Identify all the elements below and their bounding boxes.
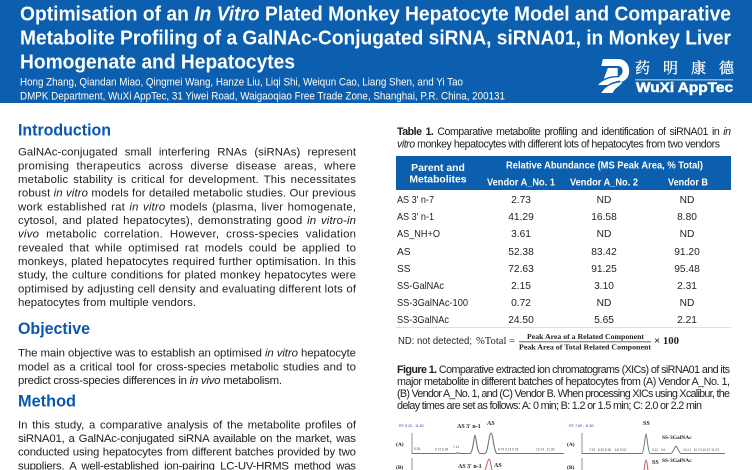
logo: WuXi AppTec — [598, 57, 735, 95]
table header: Vendor A_No. 1 — [487, 178, 555, 189]
text block: introduction: promising therapeutics across diverse disease areas, where — [18, 160, 356, 172]
table footnote formula: %Total = — [476, 336, 515, 347]
text block: method: siRNA01, a GalNAc-conjugated siRNA available on the market, was — [18, 433, 356, 445]
table caption: Table 1. Comparative metabolite profiling and identification of siRNA01 in in — [397, 126, 731, 138]
table rows: 24.50 — [508, 315, 534, 326]
chromatogram: AS panel: (A) — [396, 441, 404, 448]
chromatogram: SS panel: SS-3GalNAc — [662, 435, 692, 441]
authors: Hong Zhang, Qiandan Miao, Qingmei Wang, Hanze Liu, Liqi Shi, Weiqun Cao, Liang Shen, and Yi Tao — [20, 76, 463, 88]
text block: objective: predict cross-species differences in in vivo metabolism. — [18, 375, 282, 387]
title: Homogenate and Hepatocytes — [20, 52, 295, 74]
chromatogram: AS panel: AS — [487, 421, 495, 427]
text block: introduction: hepatocytes from multiple vendors. — [18, 297, 196, 309]
table rows: AS 3' n-7 — [397, 195, 434, 206]
table rows: SS-3GalNAc-100 — [397, 298, 468, 309]
title — [20, 4, 731, 74]
table header: Vendor A_No. 2 — [570, 178, 638, 189]
logo: WuXi AppTec: 药 — [635, 57, 650, 78]
chromatogram: SS panel — [567, 421, 725, 470]
table rows: 91.20 — [674, 247, 700, 258]
table rows: AS 3' n-1 — [397, 212, 434, 223]
table caption: vitro monkey hepatocytes with different lots of hepatocytes from two vendors — [397, 138, 720, 150]
chromatogram: AS panel — [396, 421, 564, 470]
text block: introduction: monkeys, plated hepatocytes required further optimisation. In this — [18, 256, 356, 268]
logo: WuXi AppTec: 明 — [663, 57, 678, 78]
chromatogram: SS panel: 7.93 8.25 8.36 8.8 9.02 — [589, 448, 626, 452]
chromatogram: SS panel: (A) — [567, 441, 575, 448]
chromatogram: AS panel: 10.14 11.06 — [536, 448, 555, 452]
table rows: AS_NH+O — [397, 229, 440, 240]
figure caption: Figure 1. Comparative extracted ion chromatograms (XICs) of siRNA01 and its — [397, 364, 731, 376]
chromatogram: SS panel: SS-3GalNAc — [662, 458, 692, 464]
affiliation: DMPK Department, WuXi AppTec, 31 Yiwei Road, Waigaoqiao Free Trade Zone, Shanghai, P.R. China, 200131 — [20, 90, 505, 102]
table rows: SS — [397, 264, 411, 275]
title: Metabolite Profiling of a GalNAc-Conjugated siRNA, siRNA01, in Monkey Liver — [20, 28, 731, 50]
text block: introduction: work established rat in vitro models (plasma, liver homogenate, — [17, 201, 356, 213]
text block: method: In this study, a comparative analysis of the metabolite profiles of — [18, 419, 357, 431]
table rows: 95.48 — [674, 264, 700, 275]
chromatogram: AS panel: 6.72 6.94 — [435, 448, 449, 452]
table header: Parent and — [411, 163, 465, 174]
text block: introduction: vivo metabolic correlation. However, cross-species validation — [18, 229, 356, 241]
heading: Objective: Objective — [18, 320, 90, 338]
text block: objective: The main objective was to establish an optimised in vitro hepatocyte — [18, 348, 356, 360]
title: Optimisation of an In Vitro Plated Monkey Hepatocyte Model and Comparative — [20, 4, 731, 26]
chromatogram: AS panel: 8.79 9.13 9.26 — [498, 448, 519, 452]
table rows: 0.72 — [511, 298, 531, 309]
table caption — [397, 126, 731, 150]
chromatogram: SS panel: 10.21 10.74 10.97 11.23 — [683, 448, 719, 452]
table footnote formula — [398, 332, 679, 352]
heading: Method: Method — [18, 393, 76, 411]
text block: objective — [18, 348, 356, 387]
table rows: ND — [597, 298, 611, 309]
table rows: 83.42 — [591, 247, 617, 258]
logo: WuXi AppTec: 康 — [691, 57, 706, 78]
chromatogram: SS panel: SS — [643, 421, 650, 427]
heading: Introduction: Introduction — [18, 122, 111, 140]
table header: Relative Abundance (MS Peak Area, % Total) — [506, 160, 703, 171]
chromatogram: SS panel: SS — [652, 460, 659, 466]
text block: introduction: GalNAc-conjugated small interfering RNAs (siRNAs) represent — [18, 147, 357, 159]
text block: objective: model as a critical tool for cross-species metabolic studies and to — [18, 361, 356, 373]
text block: method — [18, 419, 357, 470]
chromatogram: SS panel: RT: 7.60 - 11.50 — [569, 424, 594, 428]
text block: introduction: metabolic stability is critical for development. This necessitates — [18, 174, 356, 186]
table rows: 52.38 — [508, 247, 534, 258]
figure caption: major metabolite in different batches of hepatocytes from (A) Vendor A_No. 1, — [397, 376, 730, 388]
table rows: 2.21 — [677, 315, 697, 326]
logo: WuXi AppTec: WuXi AppTec — [636, 79, 733, 95]
table rows: 41.29 — [508, 212, 534, 223]
table rows: ND — [680, 229, 694, 240]
figure caption: delay times are set as follows: A: 0 min; B: 1.2 or 1.5 min; C: 2.0 or 2.2 min — [397, 400, 702, 412]
chromatogram: AS panel: AS 3' n-1 — [457, 424, 481, 430]
table rows: 72.63 — [508, 264, 534, 275]
table footnote formula: × 100 — [654, 336, 679, 347]
table rows: 5.65 — [594, 315, 614, 326]
text block: introduction: cytosol, and plated hepatocytes), demonstrating good in vitro-in — [18, 215, 356, 227]
text block: introduction: revealed that while optimised rat models could be applied to — [18, 242, 356, 254]
table header — [396, 156, 731, 190]
table footnote formula: Peak Area of Total Related Component — [519, 342, 651, 352]
text block: introduction: optimised by adjusting cell density and evaluating different lots of — [18, 283, 357, 295]
chromatogram: AS panel: RT: 5.20 - 11.50 — [399, 424, 424, 428]
chromatogram: AS panel: AS — [494, 463, 502, 469]
table header: Metabolites — [409, 175, 467, 186]
text block: introduction: robust in vitro models for detailed metabolic studies. Our previous — [18, 188, 356, 200]
table rows: SS-GalNAc — [397, 281, 444, 292]
text block: introduction: study, the culture conditions for plated monkey hepatocytes were — [18, 270, 356, 282]
table rows: 2.15 — [511, 281, 531, 292]
text block: introduction — [17, 147, 357, 309]
table rows: ND — [680, 298, 694, 309]
table rows — [397, 195, 700, 326]
table rows: 8.80 — [677, 212, 697, 223]
table rows: 3.10 — [594, 281, 614, 292]
table rows: 91.25 — [591, 264, 617, 275]
text block: method: conducted using hepatocytes from different batches provided by two — [18, 447, 356, 459]
header banner — [0, 0, 752, 103]
table footnote formula: Peak Area of a Related Component — [527, 332, 644, 341]
table rows: AS — [397, 247, 411, 258]
chromatogram: AS panel: 7.14 — [453, 445, 459, 449]
table rows: ND — [597, 195, 611, 206]
table rows: 16.58 — [591, 212, 617, 223]
figure caption — [397, 364, 731, 412]
chromatogram: AS panel: 5.35 — [414, 447, 420, 451]
figure caption: (B) Vendor A_No. 1, and (C) Vendor B. When processing XICs using Xcalibur, the — [397, 388, 730, 400]
table 1 — [396, 156, 731, 328]
table rows: 3.61 — [511, 229, 531, 240]
table footnote formula: ND: not detected; — [398, 336, 472, 347]
table rows: SS-3GalNAc — [397, 315, 449, 326]
chromatogram: AS panel: AS 3' n-1 — [458, 464, 482, 470]
logo: WuXi AppTec: 德 — [719, 57, 735, 78]
table header: Vendor B — [668, 178, 708, 189]
table rows: 2.31 — [677, 281, 697, 292]
table rows: 2.73 — [511, 195, 531, 206]
table rows: ND — [680, 195, 694, 206]
chromatogram: SS panel: 9.12 9.6 — [652, 448, 666, 452]
table rows: ND — [597, 229, 611, 240]
